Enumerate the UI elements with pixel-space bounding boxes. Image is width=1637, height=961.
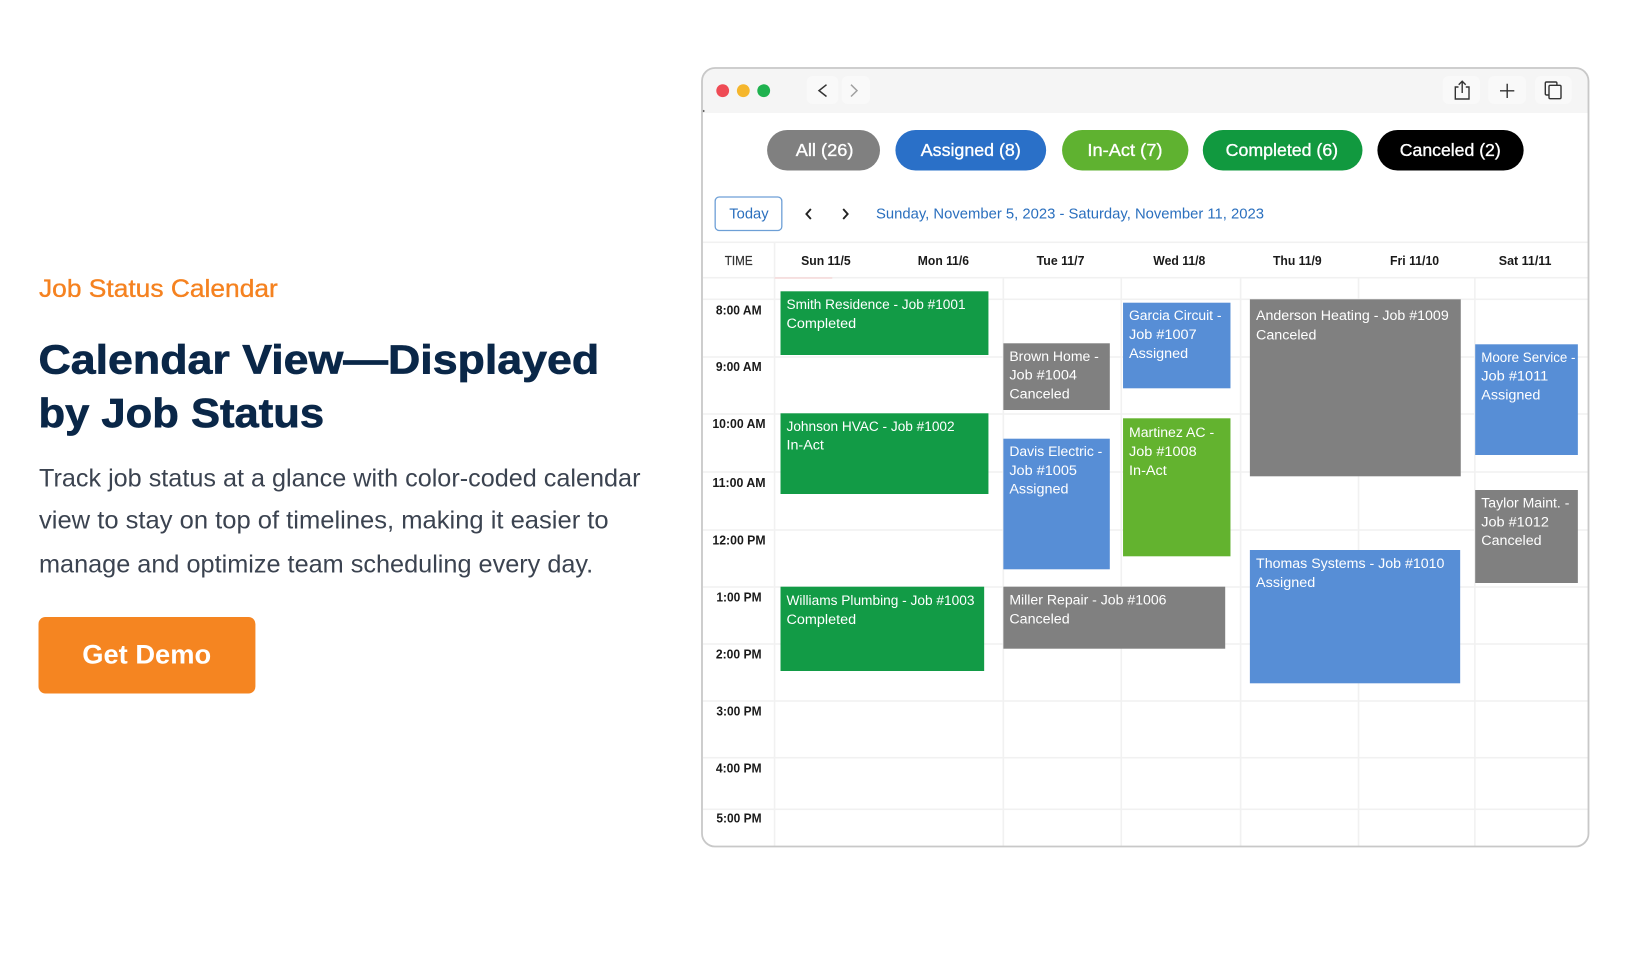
- event: Thomas Systems: Thomas Systems - Job #1010: [1256, 555, 1445, 571]
- event: Miller Repair: Miller Repair - Job #1006: [1009, 592, 1167, 608]
- event: Garcia Circuit: Assigned: [1129, 345, 1188, 361]
- event: Moore Service: Moore Service -: [1481, 349, 1576, 365]
- time labels: 1:00 PM: [716, 590, 762, 605]
- time labels: 9:00 AM: [716, 360, 762, 374]
- icon: duplicate tabs: [1535, 76, 1572, 104]
- event: Davis Electric: Job #1005: [1009, 462, 1077, 478]
- event: Williams Plumbing: [781, 587, 984, 671]
- event: Brown Home: Brown Home -: [1009, 348, 1099, 364]
- event: Johnson HVAC: Johnson HVAC - Job #1002: [786, 418, 955, 434]
- browser window panel: [702, 68, 1588, 846]
- time labels: 8:00 AM: [716, 303, 762, 318]
- event: Brown Home: [1003, 343, 1110, 410]
- event: Brown Home: Canceled: [1009, 385, 1070, 401]
- button: Get Demo: Get Demo: [82, 639, 211, 670]
- event: Smith Residence: Completed: [786, 315, 856, 331]
- day header row: [725, 254, 1552, 268]
- event: Anderson Heating: Canceled: [1256, 326, 1316, 343]
- event: Taylor Maint.: [1475, 490, 1578, 583]
- event: Moore Service: [1475, 344, 1578, 455]
- time labels: 3:00 PM: [716, 704, 762, 719]
- eyebrow: Job Status Calendar: Job Status Calendar: [39, 275, 278, 303]
- icon: previous week: [806, 209, 811, 219]
- event: Moore Service: Assigned: [1481, 387, 1540, 403]
- body paragraph: view to stay on top of timelines, making it easier to: [39, 506, 609, 535]
- event: Thomas Systems: Assigned: [1256, 574, 1315, 590]
- time labels: 5:00 PM: [716, 811, 762, 826]
- event: Johnson HVAC: [781, 413, 988, 494]
- day header row: TIME: [725, 254, 753, 268]
- icon: next week: [843, 209, 848, 219]
- today button: [715, 197, 782, 230]
- time labels: 2:00 PM: [716, 647, 762, 662]
- event: Davis Electric: Assigned: [1009, 481, 1069, 497]
- title bar: [702, 68, 1588, 113]
- time labels: 11:00 AM: [712, 476, 766, 490]
- left text column: [39, 275, 640, 694]
- body paragraph: manage and optimize team scheduling every day.: [39, 550, 593, 579]
- event: Garcia Circuit: [1123, 303, 1230, 388]
- window content: [703, 130, 1588, 846]
- window traffic lights: [716, 84, 770, 97]
- day header row: Tue 11/7: [1037, 254, 1085, 268]
- event: Williams Plumbing: Williams Plumbing - Job #1003: [786, 592, 975, 608]
- event: Taylor Maint.: Job #1012: [1481, 513, 1549, 529]
- event: Williams Plumbing: Completed: [786, 611, 856, 627]
- day header row: Wed 11/8: [1153, 254, 1205, 268]
- day header row: Fri 11/10: [1390, 254, 1439, 268]
- event: Smith Residence: Smith Residence - Job #1001: [786, 296, 966, 312]
- event: Garcia Circuit: Garcia Circuit -: [1129, 307, 1222, 323]
- heading: by Job Status: [39, 390, 324, 436]
- pill: Assigned: Assigned (8): [921, 140, 1021, 160]
- event: Miller Repair: Canceled: [1009, 611, 1070, 627]
- day header row: Mon 11/6: [918, 254, 969, 268]
- pill: Canceled: Canceled (2): [1400, 140, 1501, 160]
- pill: Canceled: [1377, 130, 1524, 170]
- pill: Completed: Completed (6): [1226, 140, 1338, 160]
- pill: All: [767, 130, 880, 170]
- pill: All: All (26): [796, 140, 853, 160]
- event: Davis Electric: Davis Electric -: [1009, 443, 1103, 459]
- body paragraph: Track job status at a glance with color-coded calendar: [39, 464, 640, 493]
- event: Taylor Maint.: Canceled: [1481, 532, 1542, 548]
- event: Martinez AC: In-Act: [1129, 462, 1167, 478]
- event: Martinez AC: [1123, 418, 1230, 556]
- icon: new tab plus: [1488, 76, 1526, 104]
- event: Johnson HVAC: In-Act: [786, 437, 824, 453]
- time labels: 12:00 PM: [712, 533, 766, 548]
- today button: Today: [729, 205, 769, 222]
- event: Taylor Maint.: Taylor Maint. -: [1481, 495, 1570, 511]
- calendar grid: [703, 242, 1588, 846]
- day header row: Sun 11/5: [801, 254, 851, 268]
- event: Miller Repair: [1003, 587, 1225, 649]
- event: Martinez AC: Martinez AC -: [1129, 424, 1215, 440]
- day header row: Thu 11/9: [1273, 254, 1322, 268]
- pill: In-Act: In-Act (7): [1087, 140, 1163, 160]
- pill: In-Act: [1062, 130, 1188, 170]
- time labels: 10:00 AM: [712, 417, 766, 431]
- event: Davis Electric: [1003, 439, 1110, 569]
- time labels: 4:00 PM: [716, 761, 762, 776]
- status filter pills: [767, 130, 1524, 170]
- pill: Assigned: [895, 130, 1046, 170]
- date range: Sunday, November 5, 2023 - Saturday, November 11, 2023: [876, 205, 1264, 222]
- event: Thomas Systems: [1250, 550, 1460, 683]
- pill: Completed: [1203, 130, 1362, 170]
- event: Anderson Heating: Anderson Heating - Job #1009: [1256, 307, 1449, 323]
- icon: share: [1443, 76, 1480, 104]
- event: Brown Home: Job #1004: [1009, 367, 1077, 383]
- event: Smith Residence: [781, 291, 988, 355]
- event: Anderson Heating: [1250, 299, 1461, 476]
- date navigation: [715, 197, 1264, 230]
- heading: [39, 336, 599, 436]
- event: Martinez AC: Job #1008: [1129, 443, 1197, 459]
- heading: Calendar View—Displayed: [39, 336, 599, 383]
- icon: back and forward buttons: [807, 76, 870, 104]
- day header row: Sat 11/11: [1499, 254, 1552, 268]
- time labels: [712, 303, 766, 826]
- button: Get Demo: [39, 617, 255, 694]
- body paragraph: [39, 464, 640, 579]
- event: Garcia Circuit: Job #1007: [1129, 326, 1197, 342]
- event: Moore Service: Job #1011: [1481, 368, 1549, 384]
